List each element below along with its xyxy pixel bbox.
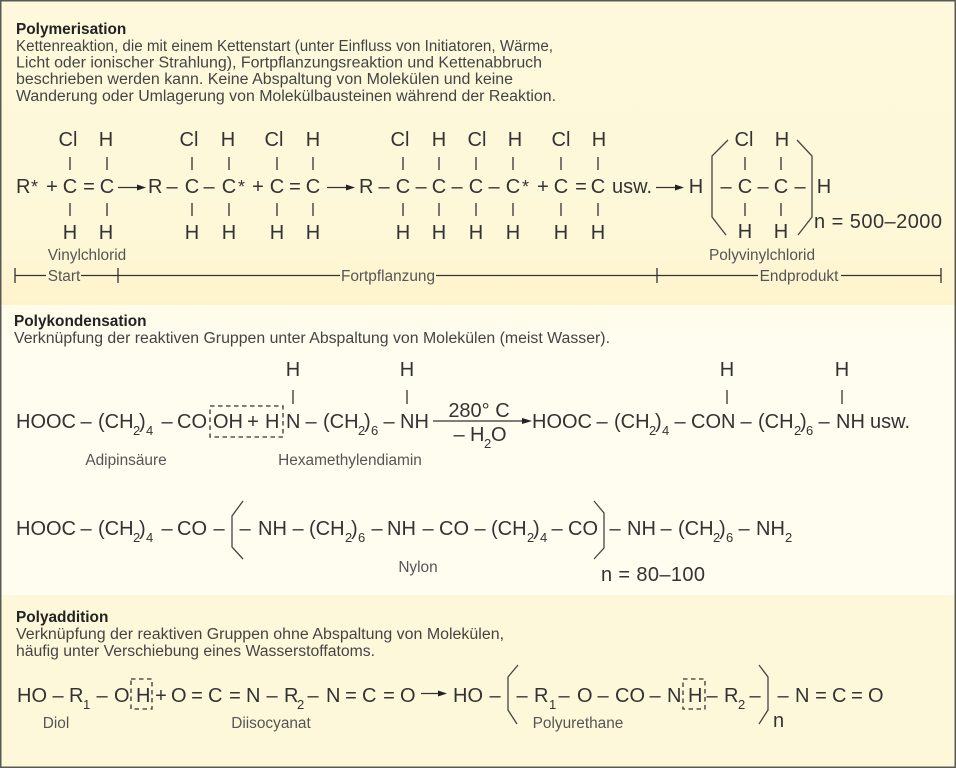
reaction product: polyurethane: – (649, 685, 661, 707)
reaction formula: vinyl chloride chain growth: C (591, 176, 605, 198)
reaction formula: vinyl chloride chain growth: C (185, 176, 199, 198)
formula: Nylon repeat unit: – (80, 518, 92, 540)
reaction product: polyurethane: = (815, 685, 827, 707)
reaction formula: adipic acid and hexamethylenediamine: HOOC (16, 411, 76, 433)
reaction formula: diol and diisocyanate: – (307, 685, 319, 707)
reaction formula: vinyl chloride chain growth: C (63, 176, 77, 198)
reaction arrow: 280° C, minus water (433, 400, 532, 451)
reaction formula: vinyl chloride chain growth: – (415, 176, 427, 198)
formula: Nylon repeat unit: HOOC (16, 518, 76, 540)
formula: Nylon repeat unit: NH (627, 518, 656, 540)
formula: Nylon repeat unit: CO (439, 518, 469, 540)
formula: Nylon repeat unit: – (239, 518, 251, 540)
reaction formula: adipic acid and hexamethylenediamine: OH (213, 411, 243, 433)
label: Nylon: Nylon (398, 559, 438, 576)
reaction product: amide chain: CON (691, 411, 735, 433)
formula: Nylon repeat unit: – (292, 518, 304, 540)
formula: Nylon repeat unit: n = 80–100 (601, 564, 705, 586)
reaction formula: diol and diisocyanate: C (362, 685, 376, 707)
reaction formula: vinyl chloride chain growth: C (270, 176, 284, 198)
reaction formula: adipic acid and hexamethylenediamine: H (265, 411, 279, 433)
reaction formula: vinyl chloride chain growth: * (522, 177, 529, 197)
heading: Polymerisation: Polymerisation (16, 21, 126, 38)
text block: Polykondensation description: Verknüpfung der reaktiven Gruppen unter Abspaltung von Molekülen (meist Wasser). (14, 330, 610, 347)
reaction product: polyurethane: n (773, 710, 784, 732)
reaction product: amide chain: HOOC (532, 411, 592, 433)
dashed box: OH + H (210, 406, 283, 437)
reaction formula: vinyl chloride chain growth: C (100, 176, 114, 198)
reaction product: amide chain: – (596, 411, 608, 433)
reaction formula: vinyl chloride chain growth: – (166, 176, 178, 198)
reaction formula: vinyl chloride chain growth: H (469, 222, 483, 244)
formula: Nylon repeat unit: CO (568, 518, 598, 540)
reaction product: amide chain: (CH (758, 411, 794, 433)
reaction product: polyurethane: HO (453, 685, 483, 707)
reaction formula: diol and diisocyanate: + (155, 685, 167, 707)
reaction formula: vinyl chloride chain growth: H (592, 129, 606, 151)
dashed box: H (683, 679, 705, 709)
reaction formula: adipic acid and hexamethylenediamine: 2 (133, 423, 140, 438)
reaction formula: diol and diisocyanate: = (383, 685, 395, 707)
reaction formula: vinyl chloride chain growth: H (432, 129, 446, 151)
reaction formula: adipic acid and hexamethylenediamine: + (247, 411, 259, 433)
formula: Nylon repeat unit: (CH (98, 518, 134, 540)
reaction formula: adipic acid and hexamethylenediamine: – (305, 411, 317, 433)
reaction formula: diol and diisocyanate: R (284, 685, 298, 707)
reaction product: polyvinyl chloride bracket: – (757, 176, 769, 198)
reaction formula: vinyl chloride chain growth: H (99, 222, 113, 244)
formula: Nylon repeat unit (16, 501, 792, 586)
reaction product: polyvinyl chloride bracket: H (689, 176, 703, 198)
reaction product: amide chain: – (818, 411, 830, 433)
label: Polyurethane: Polyurethane (533, 715, 623, 732)
reaction product: amide chain: NH (836, 411, 865, 433)
formula: Nylon repeat unit: 4 (540, 530, 547, 545)
reaction formula: diol and diisocyanate: = (229, 685, 241, 707)
reaction formula: vinyl chloride chain growth: Cl (552, 129, 570, 151)
reaction formula: vinyl chloride chain growth: H (506, 222, 520, 244)
reaction formula: vinyl chloride chain growth: R (359, 176, 373, 198)
formula: Nylon repeat unit: 6 (726, 530, 733, 545)
reaction arrow: 280° C, minus water: 280° C (448, 400, 510, 422)
label: Adipinsäure: Adipinsäure (85, 452, 167, 469)
reaction product: polyurethane: CO (615, 685, 645, 707)
reaction formula: adipic acid and hexamethylenediamine: H (286, 359, 300, 381)
reaction formula: vinyl chloride chain growth: C (554, 176, 568, 198)
reaction formula: vinyl chloride chain growth: H (99, 129, 113, 151)
reaction formula: vinyl chloride chain growth: H (432, 222, 446, 244)
reaction formula: adipic acid and hexamethylenediamine: 6 (371, 423, 378, 438)
reaction formula: vinyl chloride chain growth: C (432, 176, 446, 198)
reaction product: amide chain: H (720, 359, 734, 381)
reaction formula: adipic acid and hexamethylenediamine: H (400, 359, 414, 381)
reaction product: amide chain: 4 (662, 423, 669, 438)
reaction formula: vinyl chloride chain growth: H (591, 222, 605, 244)
reaction formula: vinyl chloride chain growth: H (185, 222, 199, 244)
reaction product: polyvinyl chloride bracket: – (720, 176, 732, 198)
reaction formula: adipic acid and hexamethylenediamine: ) (364, 411, 371, 433)
reaction product: polyvinyl chloride bracket: C (738, 176, 752, 198)
reaction formula: adipic acid and hexamethylenediamine: (CH (98, 411, 134, 433)
reaction formula: adipic acid and hexamethylenediamine (16, 359, 429, 438)
reaction formula: vinyl chloride chain growth: + (537, 176, 549, 198)
formula: Nylon repeat unit: – (474, 518, 486, 540)
reaction product: amide chain: (CH (614, 411, 650, 433)
reaction formula: adipic acid and hexamethylenediamine: – (80, 411, 92, 433)
reaction product: polyurethane: 2 (738, 697, 745, 712)
reaction product: amide chain: ) (655, 411, 662, 433)
reaction formula: vinyl chloride chain growth: R (16, 176, 30, 198)
reaction formula: vinyl chloride chain growth: – (378, 176, 390, 198)
formula: Nylon repeat unit: ) (351, 518, 358, 540)
formula: Nylon repeat unit: – (422, 518, 434, 540)
reaction product: polyurethane: – (516, 685, 528, 707)
text block: Polyaddition description (16, 626, 504, 660)
reaction product: amide chain: – (740, 411, 752, 433)
reaction product: polyurethane: – (489, 685, 501, 707)
reaction formula: diol and diisocyanate: N (326, 685, 340, 707)
reaction formula: vinyl chloride chain growth: H (306, 129, 320, 151)
reaction formula: vinyl chloride chain growth: = (83, 176, 95, 198)
reaction product: polyurethane: N (667, 685, 681, 707)
reaction formula: vinyl chloride chain growth: H (63, 222, 77, 244)
reaction formula: vinyl chloride chain growth: usw. (612, 176, 652, 198)
text block: Polymerisation description: Kettenreaktion, die mit einem Kettenstart (unter Einfluss von Initiatoren, Wärme, (16, 38, 553, 55)
reaction formula: vinyl chloride chain growth: C (469, 176, 483, 198)
formula: Nylon repeat unit: – (738, 518, 750, 540)
reaction formula: diol and diisocyanate: O (114, 685, 130, 707)
reaction product: polyvinyl chloride bracket: – (794, 176, 806, 198)
text block: Polymerisation description: Licht oder ionischer Strahlung), Fortpflanzungsreaktion und Kettenabbruch (16, 54, 542, 72)
timeline: Start, Fortpflanzung, Endprodukt: Fortpflanzung (341, 268, 435, 285)
formula: Nylon repeat unit: – (213, 518, 225, 540)
reaction product: polyurethane: R (724, 685, 738, 707)
label: Polyvinylchlorid: Polyvinylchlorid (709, 247, 815, 264)
reaction formula: vinyl chloride chain growth: Cl (468, 129, 486, 151)
reaction product: polyurethane: C (832, 685, 846, 707)
reaction product: polyurethane: – (706, 685, 718, 707)
reaction product: amide chain (532, 359, 910, 438)
reaction formula: adipic acid and hexamethylenediamine: N (286, 411, 300, 433)
formula: Nylon repeat unit: 2 (713, 530, 720, 545)
formula: Nylon repeat unit: ) (533, 518, 540, 540)
reaction formula: vinyl chloride chain growth: + (46, 176, 58, 198)
reaction formula: vinyl chloride chain growth: = (289, 176, 301, 198)
reaction product: polyvinyl chloride bracket: H (738, 221, 752, 243)
reaction product: polyvinyl chloride bracket: H (817, 176, 831, 198)
formula: Nylon repeat unit: 4 (146, 530, 153, 545)
reaction product: amide chain: – (674, 411, 686, 433)
reaction formula: vinyl chloride chain growth: – (203, 176, 215, 198)
reaction formula: vinyl chloride chain growth: * (238, 177, 245, 197)
reaction formula: diol and diisocyanate: = (345, 685, 357, 707)
reaction formula: vinyl chloride chain growth: H (554, 222, 568, 244)
timeline: Start, Fortpflanzung, Endprodukt: Start (48, 268, 81, 285)
formula: Nylon repeat unit: 2 (785, 530, 792, 545)
label: Diol: Diol (43, 715, 69, 732)
reaction formula: vinyl chloride chain growth: H (222, 222, 236, 244)
reaction product: polyurethane: R (534, 685, 548, 707)
reaction product: polyurethane: = (851, 685, 863, 707)
reaction product: polyurethane: – (597, 685, 609, 707)
reaction formula: diol and diisocyanate: O (400, 685, 416, 707)
reaction product: polyurethane: O (577, 685, 593, 707)
reaction formula: adipic acid and hexamethylenediamine: 2 (358, 423, 365, 438)
reaction product: polyurethane: 1 (549, 697, 556, 712)
reaction product: polyvinyl chloride bracket: n = 500–2000 (814, 211, 942, 233)
reaction formula: diol and diisocyanate: R (69, 685, 83, 707)
reaction formula: vinyl chloride chain growth: H (306, 222, 320, 244)
label: Vinylchlorid: Vinylchlorid (48, 247, 126, 264)
reaction formula: vinyl chloride chain growth: Cl (391, 129, 409, 151)
reaction formula: diol and diisocyanate: N (246, 685, 260, 707)
reaction formula: vinyl chloride chain growth: C (506, 176, 520, 198)
formula: Nylon repeat unit: 2 (345, 530, 352, 545)
reaction formula: vinyl chloride chain growth: = (575, 176, 587, 198)
formula: Nylon repeat unit: – (161, 518, 173, 540)
formula: Nylon repeat unit: NH (387, 518, 416, 540)
label: Diisocyanat: Diisocyanat (231, 715, 311, 732)
reaction formula: diol and diisocyanate (17, 679, 447, 712)
reaction formula: diol and diisocyanate: H (136, 685, 150, 707)
formula: Nylon repeat unit: – (551, 518, 563, 540)
reaction formula: vinyl chloride chain growth: C (222, 176, 236, 198)
reaction formula: vinyl chloride chain growth: – (451, 176, 463, 198)
reaction formula: diol and diisocyanate: HO (17, 685, 47, 707)
reaction formula: vinyl chloride chain growth: H (396, 222, 410, 244)
dashed box: H (131, 679, 152, 709)
reaction formula: diol and diisocyanate: 2 (297, 697, 304, 712)
reaction product: amide chain: 2 (794, 423, 801, 438)
reaction product: amide chain: usw. (870, 411, 910, 433)
panel: Polymerisation (0, 0, 956, 305)
formula: Nylon repeat unit: ) (139, 518, 146, 540)
reaction formula: vinyl chloride chain growth: Cl (59, 129, 77, 151)
formula: Nylon repeat unit: (CH (491, 518, 527, 540)
reaction product: amide chain: 6 (806, 423, 813, 438)
reaction formula: adipic acid and hexamethylenediamine: NH (400, 411, 429, 433)
reaction formula: vinyl chloride chain growth: C (306, 176, 320, 198)
formula: Nylon repeat unit: NH (258, 518, 287, 540)
reaction formula: vinyl chloride chain growth: C (396, 176, 410, 198)
reaction formula: diol and diisocyanate: C (208, 685, 222, 707)
reaction formula: vinyl chloride chain growth: H (508, 129, 522, 151)
reaction product: polyvinyl chloride bracket: H (774, 221, 788, 243)
panel: Polykondensation (0, 305, 956, 595)
reaction product: polyurethane: – (749, 685, 761, 707)
text block: Polymerisation description: beschrieben werden kann. Keine Abspaltung von Molekülen und keine (16, 71, 513, 88)
reaction product: amide chain: ) (800, 411, 807, 433)
reaction product: polyurethane: – (777, 685, 789, 707)
formula: Nylon repeat unit: 2 (527, 530, 534, 545)
reaction product: amide chain: H (835, 359, 849, 381)
timeline: Start, Fortpflanzung, Endprodukt (15, 268, 941, 285)
formula: Nylon repeat unit: CO (177, 518, 207, 540)
formula: Nylon repeat unit: ) (719, 518, 726, 540)
reaction formula: diol and diisocyanate: – (52, 685, 64, 707)
reaction formula: diol and diisocyanate: 1 (83, 697, 90, 712)
reaction formula: vinyl chloride chain growth: * (31, 177, 38, 197)
reaction formula: adipic acid and hexamethylenediamine: CO (177, 411, 207, 433)
formula: Nylon repeat unit: (CH (678, 518, 714, 540)
reaction product: polyvinyl chloride bracket (689, 129, 942, 243)
reaction formula: vinyl chloride chain growth: R (148, 176, 162, 198)
text block: Polymerisation description (16, 38, 556, 105)
reaction formula: diol and diisocyanate: = (191, 685, 203, 707)
formula: Nylon repeat unit: – (371, 518, 383, 540)
formula: Nylon repeat unit: NH (756, 518, 785, 540)
formula: Nylon repeat unit: – (660, 518, 672, 540)
formula: Nylon repeat unit: 6 (358, 530, 365, 545)
text block: Polyaddition description: häufig unter Verschiebung eines Wasserstoffatoms. (16, 643, 375, 660)
reaction formula: vinyl chloride chain growth: – (488, 176, 500, 198)
reaction product: polyurethane: N (795, 685, 809, 707)
text block: Polyaddition description: Verknüpfung der reaktiven Gruppen ohne Abspaltung von Molekülen, (16, 626, 504, 643)
text block: Polymerisation description: Wanderung oder Umlagerung von Molekülbausteinen während der Reaktion. (16, 88, 556, 105)
reaction product: polyurethane: H (688, 685, 702, 707)
reaction formula: vinyl chloride chain growth: + (252, 176, 264, 198)
reaction formula: vinyl chloride chain growth: Cl (265, 129, 283, 151)
formula: Nylon repeat unit: – (609, 518, 621, 540)
reaction arrow: 280° C, minus water: H (470, 424, 484, 446)
reaction formula: adipic acid and hexamethylenediamine: 4 (146, 423, 153, 438)
label: Hexamethylendiamin: Hexamethylendiamin (278, 452, 422, 469)
formula: Nylon repeat unit: 2 (133, 530, 140, 545)
reaction formula: adipic acid and hexamethylenediamine: – (383, 411, 395, 433)
reaction formula: vinyl chloride chain growth (16, 129, 684, 244)
reaction product: polyurethane: O (868, 685, 884, 707)
reaction arrow: 280° C, minus water: – (453, 424, 465, 446)
formula: Nylon repeat unit: (CH (309, 518, 345, 540)
reaction formula: vinyl chloride chain growth: H (221, 129, 235, 151)
reaction product: polyvinyl chloride bracket: Cl (735, 129, 753, 151)
heading: Polyaddition: Polyaddition (16, 609, 108, 626)
reaction formula: adipic acid and hexamethylenediamine: (CH (323, 411, 359, 433)
reaction formula: adipic acid and hexamethylenediamine: – (161, 411, 173, 433)
reaction formula: diol and diisocyanate: – (266, 685, 278, 707)
reaction product: polyurethane: – (558, 685, 570, 707)
reaction product: polyvinyl chloride bracket: C (774, 176, 788, 198)
heading: Polykondensation: Polykondensation (14, 313, 147, 330)
reaction formula: diol and diisocyanate: O (171, 685, 187, 707)
timeline: Start, Fortpflanzung, Endprodukt: Endprodukt (760, 268, 839, 285)
reaction arrow: 280° C, minus water: 2 (484, 436, 491, 451)
reaction formula: diol and diisocyanate: – (96, 685, 108, 707)
reaction product: polyvinyl chloride bracket: H (775, 129, 789, 151)
reaction formula: adipic acid and hexamethylenediamine: ) (139, 411, 146, 433)
reaction formula: vinyl chloride chain growth: H (270, 222, 284, 244)
reaction arrow: 280° C, minus water: O (491, 424, 507, 446)
reaction formula: vinyl chloride chain growth: Cl (180, 129, 198, 151)
reaction product: amide chain: 2 (649, 423, 656, 438)
panel: Polyaddition (0, 595, 956, 768)
reaction product: polyurethane (453, 665, 884, 732)
